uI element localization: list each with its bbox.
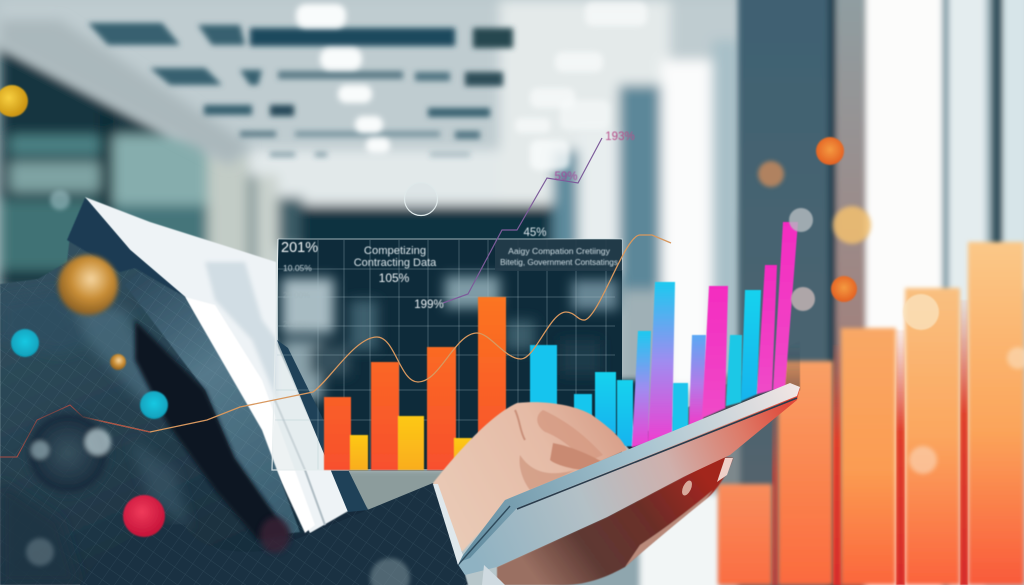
sphere: glass outline: [404, 182, 438, 216]
businessman jacket: [0, 197, 468, 585]
right jacket edge: [277, 340, 368, 512]
thumb nail: [680, 458, 733, 497]
chart grid lines: [272, 239, 622, 470]
ceiling lights: [296, 2, 647, 170]
finger creases: [537, 410, 603, 463]
upper hand: [433, 402, 627, 552]
sphere: small pale left: [50, 190, 70, 210]
sphere: gold large: [58, 255, 118, 315]
sphere: cyan left: [11, 329, 39, 357]
sphere: orange upper right: [816, 137, 844, 165]
sphere: yellow top left: [0, 85, 28, 117]
sphere: small gold: [110, 354, 126, 370]
chart labels: 199%: [414, 299, 444, 311]
sphere: white small: [791, 287, 815, 311]
sphere: red: [123, 495, 165, 537]
chart labels: Competizing: [364, 245, 426, 257]
orange trend line: [0, 235, 671, 457]
sphere: far right: [1007, 347, 1024, 369]
chart labels: 10.05%: [283, 263, 312, 273]
shirt cuff: [433, 484, 505, 585]
chart labels: 20.05%: [283, 320, 310, 329]
sphere: dark glass: [22, 407, 114, 499]
sphere: faint bottom left: [26, 538, 54, 566]
sphere: pale orange: [758, 161, 784, 187]
chart labels: 193%: [605, 131, 635, 143]
ceiling beam: [0, 20, 250, 165]
ceiling panels: [88, 23, 513, 157]
lower hand: [497, 457, 733, 585]
chart labels: Contracting Data: [354, 257, 437, 269]
jacket sleeve: [80, 483, 466, 585]
sphere: faint bottom: [370, 558, 410, 585]
purple trend line: [443, 138, 602, 303]
chart labels: [281, 131, 635, 329]
sphere: pale gold: [833, 206, 871, 244]
sphere: cream: [903, 294, 939, 330]
chart labels: 59%: [554, 171, 578, 183]
bar chart: [324, 222, 800, 470]
sphere: cyan middle: [140, 391, 168, 419]
jacket highlights: [0, 290, 190, 585]
translucent panel over shirt: [272, 340, 335, 470]
sphere: orange lower: [831, 276, 857, 302]
chart panel backing: [278, 239, 645, 471]
shirt: [85, 197, 350, 533]
lapel: [67, 198, 300, 540]
chart labels: Bitetig, Government Contsatings: [500, 258, 618, 267]
right columns: [265, 0, 1024, 585]
dark caption box: [495, 240, 622, 271]
sphere: pale lower: [909, 446, 937, 474]
sphere: pale white: [789, 208, 813, 232]
chart labels: 201%: [281, 240, 318, 256]
chart labels: Aaigy Compation Cretiingy: [508, 246, 611, 256]
chart labels: 45%: [523, 227, 547, 239]
chart labels: 20.00%: [283, 291, 310, 300]
tablet: [457, 383, 800, 575]
right background orange bars: [718, 242, 1024, 585]
chart labels: 105%: [379, 271, 410, 285]
